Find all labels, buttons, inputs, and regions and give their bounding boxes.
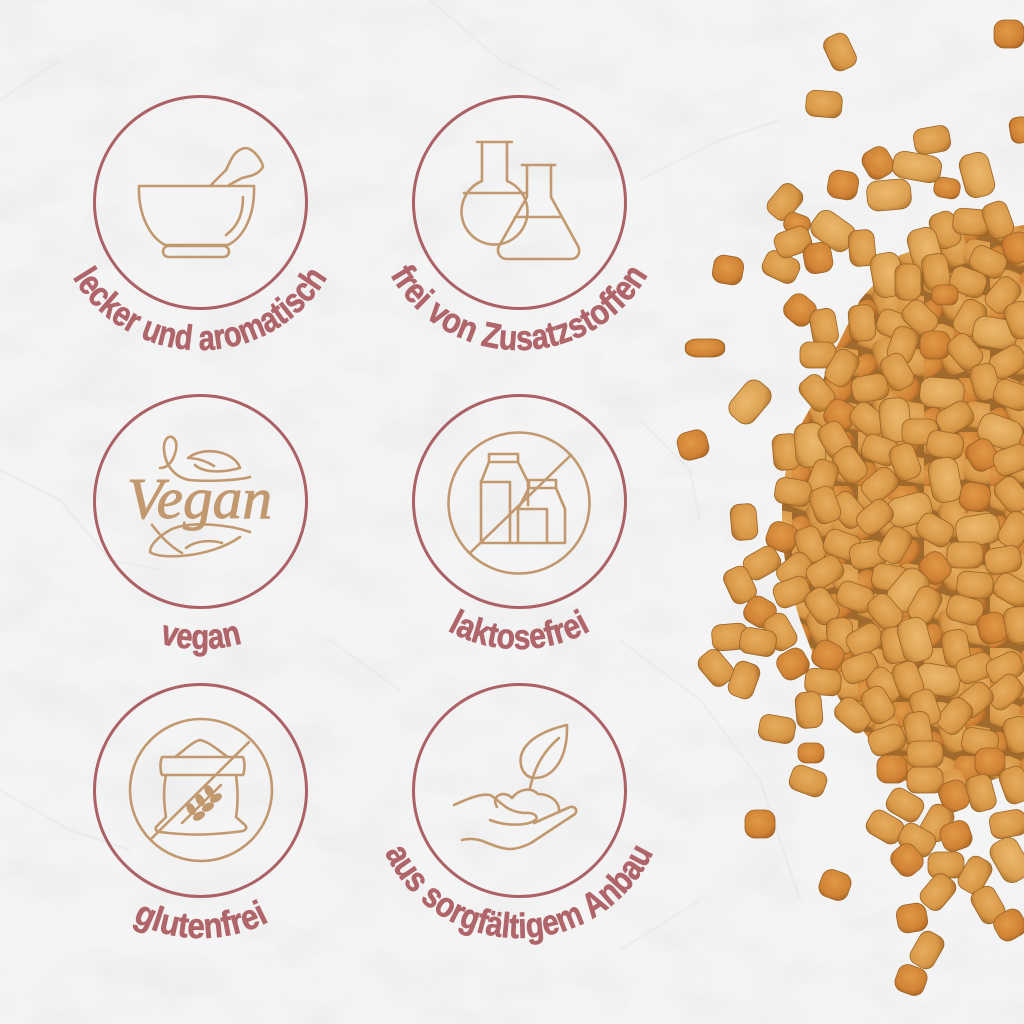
badge: frei von Zusatzstoffen bbox=[391, 95, 648, 351]
badge: vegan bbox=[93, 394, 308, 657]
label: frei von Zusatzstoffen bbox=[391, 265, 648, 351]
label: vegan bbox=[164, 624, 241, 657]
badge: aus sorgfältigem Anbau bbox=[386, 683, 653, 945]
badge: glutenfrei bbox=[93, 683, 308, 939]
fenugreek seeds bbox=[675, 20, 1024, 998]
icon: mortar and pestle bbox=[139, 148, 263, 257]
icon: hand holding seedling bbox=[454, 725, 576, 849]
icon: laboratory flasks bbox=[462, 142, 579, 259]
label: glutenfrei bbox=[132, 899, 268, 939]
icon: vegan lettering: Vegan bbox=[127, 466, 272, 531]
icon: crossed-out flour sack bbox=[130, 719, 272, 861]
icon: crossed-out milk cartons bbox=[448, 432, 590, 574]
label: laktosefrei bbox=[448, 608, 590, 650]
badge: lecker und aromatisch bbox=[73, 95, 327, 351]
label: lecker und aromatisch bbox=[73, 265, 327, 351]
label: aus sorgfältigem Anbau bbox=[386, 845, 653, 945]
icon: vegan lettering bbox=[127, 437, 272, 556]
badge: laktosefrei bbox=[412, 394, 627, 650]
pile base texture bbox=[782, 225, 1024, 790]
